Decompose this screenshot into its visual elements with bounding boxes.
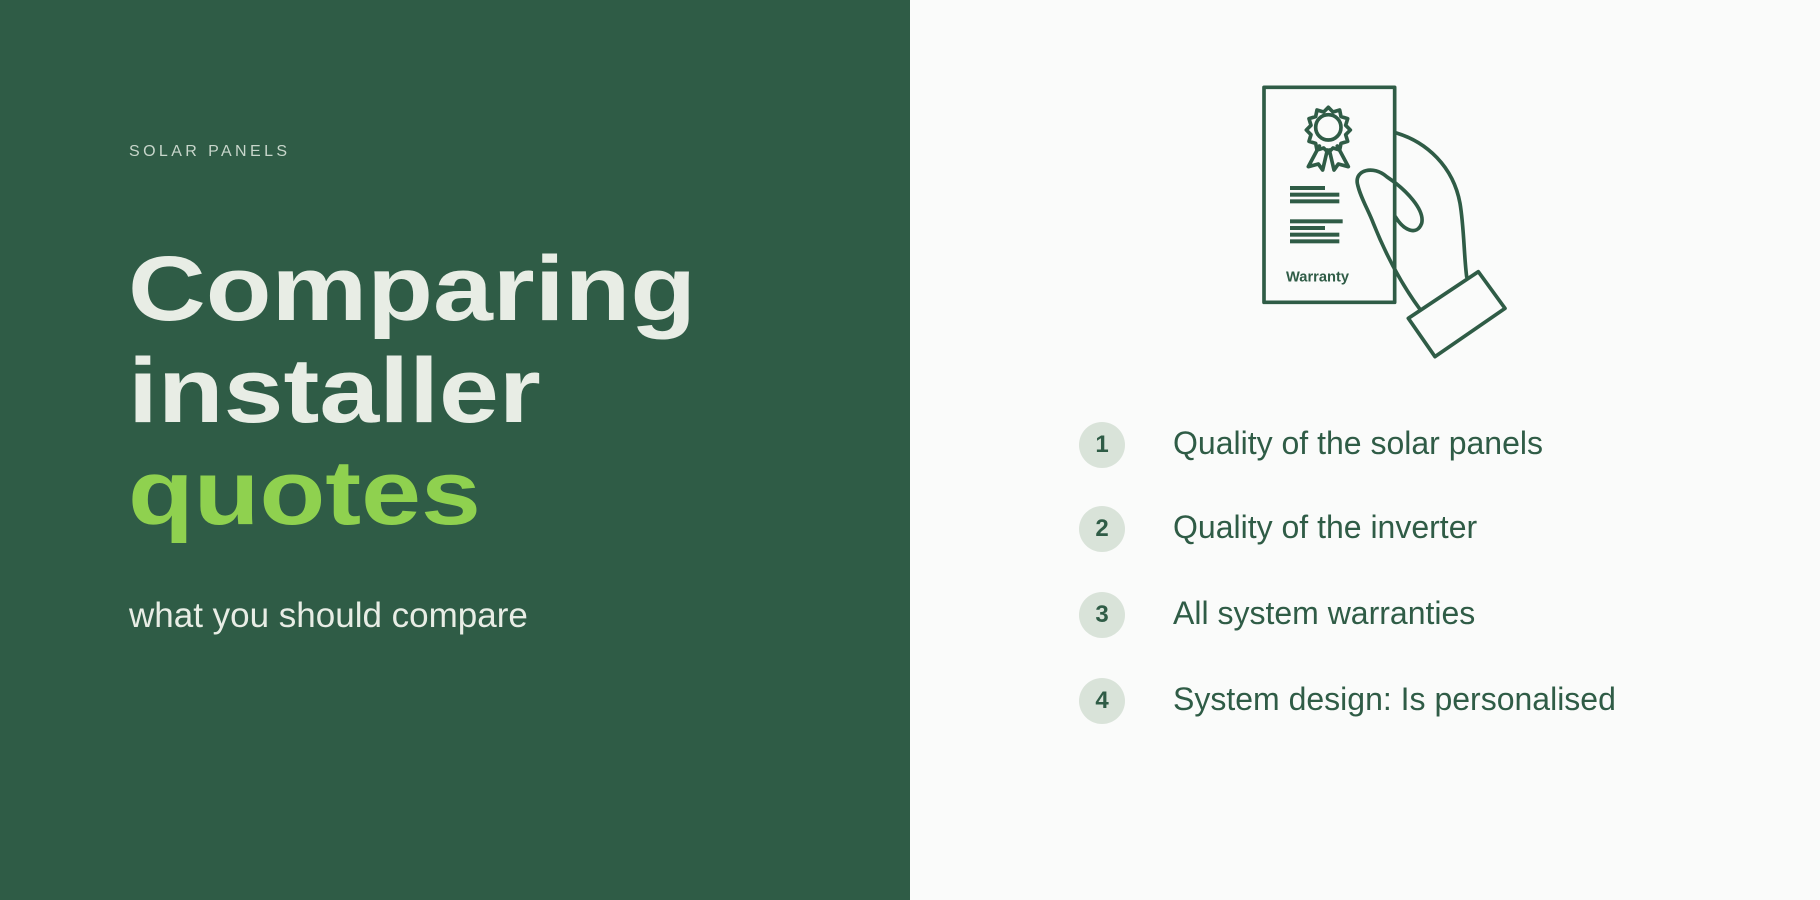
list item 1 — [1079, 422, 1543, 468]
panel: left — [0, 0, 910, 900]
list item 2: 2 — [1095, 515, 1109, 542]
list item 1: 1 — [1095, 431, 1109, 458]
list item 2 — [1079, 506, 1477, 552]
list item 1: Quality of the solar panels — [1173, 425, 1543, 461]
title — [128, 238, 696, 544]
list item 4: 4 — [1095, 687, 1109, 714]
subtitle: what you should compare — [129, 596, 528, 635]
list item 3 — [1079, 592, 1475, 638]
title: Comparing — [128, 238, 696, 340]
list item 4 — [1079, 678, 1616, 724]
list item 4: System design: Is personalised — [1173, 681, 1616, 717]
title: installer — [128, 340, 541, 442]
kicker: SOLAR PANELS — [129, 143, 290, 160]
icon: warranty hand: Warranty — [1286, 270, 1350, 286]
list item 3: 3 — [1095, 601, 1109, 628]
list item 3: All system warranties — [1173, 595, 1475, 631]
icon: warranty hand — [1262, 86, 1507, 359]
title: quotes — [128, 442, 481, 544]
list item 2: Quality of the inverter — [1173, 509, 1477, 545]
